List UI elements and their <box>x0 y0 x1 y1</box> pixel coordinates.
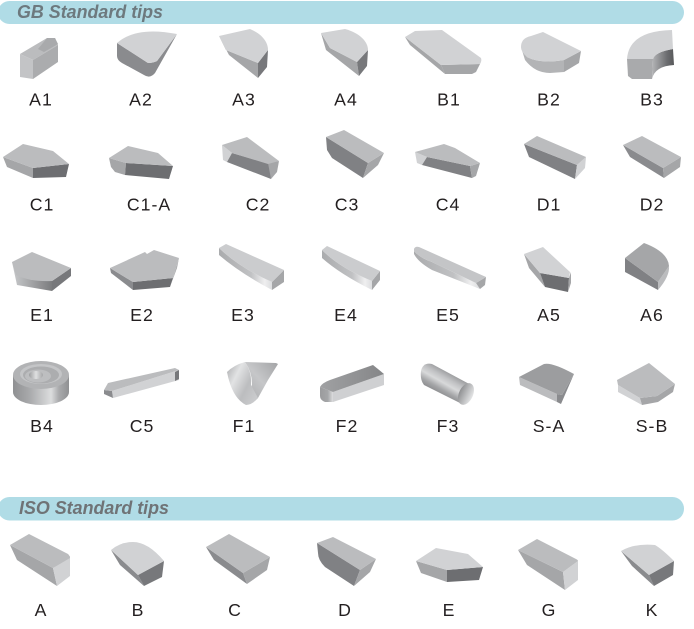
tip A6 <box>625 243 669 325</box>
label: E2: E2 <box>130 305 154 325</box>
icon: G <box>518 539 578 590</box>
icon: E3 <box>219 244 284 290</box>
tip E1 <box>12 252 71 325</box>
icon: F2 <box>320 365 384 402</box>
label: D2: D2 <box>640 194 664 214</box>
label: E3: E3 <box>231 305 255 325</box>
label: E5: E5 <box>436 305 460 325</box>
icon: E <box>416 548 483 582</box>
icon: C5 <box>104 368 179 398</box>
tip G (ISO) <box>518 539 578 620</box>
label: F1: F1 <box>233 416 255 436</box>
tip C2 <box>222 137 279 214</box>
tip A5 <box>524 247 571 325</box>
icon: C3 <box>326 130 384 178</box>
tip E (ISO) <box>416 548 483 620</box>
label: F3: F3 <box>437 416 459 436</box>
icon: D <box>317 537 376 586</box>
icon: B <box>111 542 164 586</box>
label: A4: A4 <box>334 90 358 110</box>
tip B4 <box>13 361 69 436</box>
icon: C2 <box>222 137 279 179</box>
heading bar: GB Standard tips <box>0 1 684 24</box>
icon: C4 <box>415 144 480 178</box>
icon: B1 <box>405 30 481 74</box>
label: B1: B1 <box>437 90 461 110</box>
icon: A3 <box>219 29 268 78</box>
icon: A <box>10 534 70 586</box>
icon: C1-A <box>109 146 173 179</box>
heading bar: GB Standard tips: GB Standard tips <box>17 2 163 22</box>
tip C5 <box>104 368 179 436</box>
label: B: B <box>132 600 144 620</box>
icon: D2 <box>623 136 681 178</box>
tip B3 <box>627 30 674 110</box>
label: C1-A: C1-A <box>127 194 171 214</box>
tip F1 <box>227 362 278 436</box>
tip A3 <box>219 29 268 110</box>
tip S-B <box>617 363 675 436</box>
tip C3 <box>326 130 384 214</box>
icon: S-A <box>519 364 574 404</box>
tip B1 <box>405 30 481 110</box>
label: C3: C3 <box>335 194 359 214</box>
tip D2 <box>623 136 681 214</box>
icon: E4 <box>322 246 380 290</box>
label: A1: A1 <box>29 90 53 110</box>
tip E3 <box>219 244 284 325</box>
tip E5 <box>414 247 486 325</box>
label: D1: D1 <box>537 194 561 214</box>
tip E4 <box>322 246 380 325</box>
icon: A4 <box>321 29 368 76</box>
icon: C <box>206 534 270 584</box>
icon: B2 <box>521 32 581 73</box>
label: A6: A6 <box>640 305 664 325</box>
tip D1 <box>524 136 586 214</box>
label: A5: A5 <box>537 305 561 325</box>
icon: D1 <box>524 136 586 179</box>
label: E4: E4 <box>334 305 358 325</box>
tip B (ISO) <box>111 542 164 620</box>
tip E2 <box>110 250 179 325</box>
tip F3 <box>421 364 477 436</box>
icon: S-B <box>617 363 675 405</box>
icon: A6 <box>625 243 669 290</box>
icon: E1 <box>12 252 71 291</box>
icon: F1 <box>227 362 278 405</box>
heading bar: ISO Standard tips <box>0 497 684 520</box>
label: A3: A3 <box>232 90 256 110</box>
label: S-B: S-B <box>636 416 668 436</box>
tip A2 <box>117 31 177 109</box>
label: D: D <box>338 600 352 620</box>
tip K (ISO) <box>621 545 674 620</box>
tip S-A <box>519 364 574 436</box>
icon: K <box>621 545 674 586</box>
tip C4 <box>415 144 480 214</box>
tip A1 <box>20 38 58 110</box>
icon: B3 <box>627 30 674 79</box>
tip F2 <box>320 365 384 436</box>
tip C1 <box>3 144 69 214</box>
label: G: G <box>542 600 556 620</box>
tip B2 <box>521 32 581 110</box>
icon: E5 <box>414 247 486 289</box>
label: C1: C1 <box>30 194 54 214</box>
icon: C1 <box>3 144 69 178</box>
label: E1: E1 <box>30 305 54 325</box>
icon: F3 <box>421 364 477 407</box>
icon: A2 <box>117 31 177 77</box>
icon: A1 <box>20 38 58 79</box>
label: A2: A2 <box>129 90 153 110</box>
icon: E2 <box>110 250 179 290</box>
tip C (ISO) <box>206 534 270 620</box>
label: B4: B4 <box>30 416 54 436</box>
label: C4: C4 <box>436 194 460 214</box>
label: C2: C2 <box>246 194 270 214</box>
tip D (ISO) <box>317 537 376 620</box>
label: E: E <box>443 600 455 620</box>
label: F2: F2 <box>336 416 358 436</box>
heading bar: ISO Standard tips: ISO Standard tips <box>19 498 169 518</box>
tip A (ISO) <box>10 534 70 620</box>
label: A: A <box>35 600 47 620</box>
icon: A5 <box>524 247 571 292</box>
tip C1-A <box>109 146 173 214</box>
label: B3: B3 <box>640 90 664 110</box>
label: K: K <box>646 600 658 620</box>
label: S-A: S-A <box>533 416 565 436</box>
label: B2: B2 <box>537 90 561 110</box>
icon: B4 <box>13 361 69 405</box>
label: C5: C5 <box>130 416 154 436</box>
tip A4 <box>321 29 368 110</box>
label: C: C <box>228 600 242 620</box>
